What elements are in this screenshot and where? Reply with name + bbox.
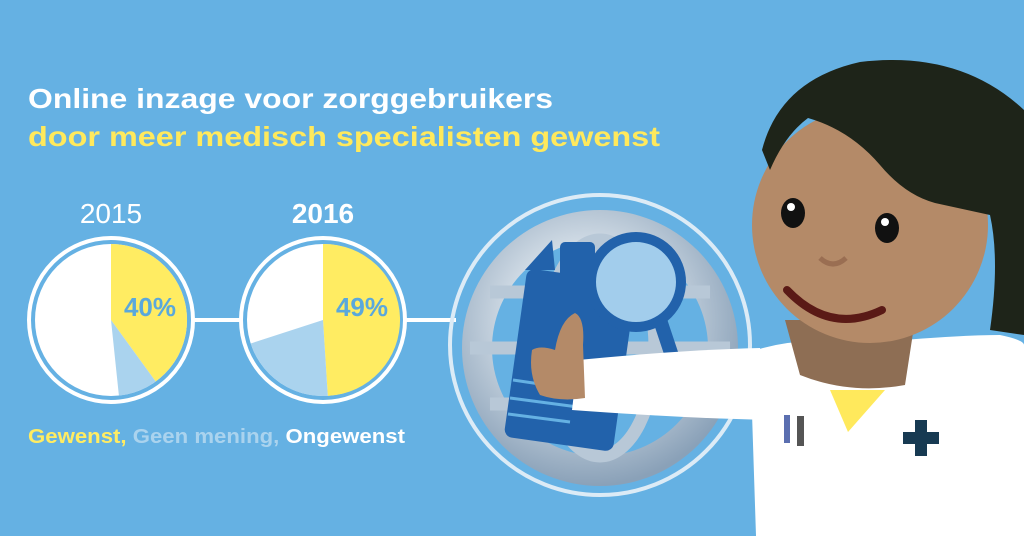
- title: door meer medisch specialisten gewenst: [28, 121, 660, 152]
- hair: [762, 60, 1024, 335]
- head: [752, 107, 988, 343]
- pie chart: 2016: 2016: [292, 198, 354, 229]
- yellow shirt: [830, 390, 885, 432]
- coat: [750, 335, 1024, 536]
- pie chart: 2016: [241, 198, 405, 402]
- thumb/hand: [531, 313, 585, 399]
- neck: [785, 320, 915, 388]
- smile: [787, 290, 882, 319]
- nose: [820, 258, 846, 264]
- pens: [784, 415, 790, 443]
- pie chart: 2016: 49%: [336, 292, 388, 322]
- title: Online inzage voor zorggebruikers: [28, 83, 553, 114]
- eyes: [781, 198, 805, 228]
- pie chart: 2015: 40%: [124, 292, 176, 322]
- title: [28, 83, 660, 152]
- connector lines: [193, 318, 456, 322]
- arm: [572, 348, 770, 420]
- cross logo: [903, 420, 939, 456]
- icon: magnifying glass: [591, 237, 681, 368]
- legend: Gewenst, Geen mening, Ongewenst: [28, 426, 405, 448]
- pie chart: 2015: [29, 198, 193, 402]
- icon: globe: [450, 195, 750, 495]
- pie chart: 2015: 2015: [80, 198, 142, 229]
- doctor: [531, 60, 1024, 536]
- icon: document: [504, 240, 636, 452]
